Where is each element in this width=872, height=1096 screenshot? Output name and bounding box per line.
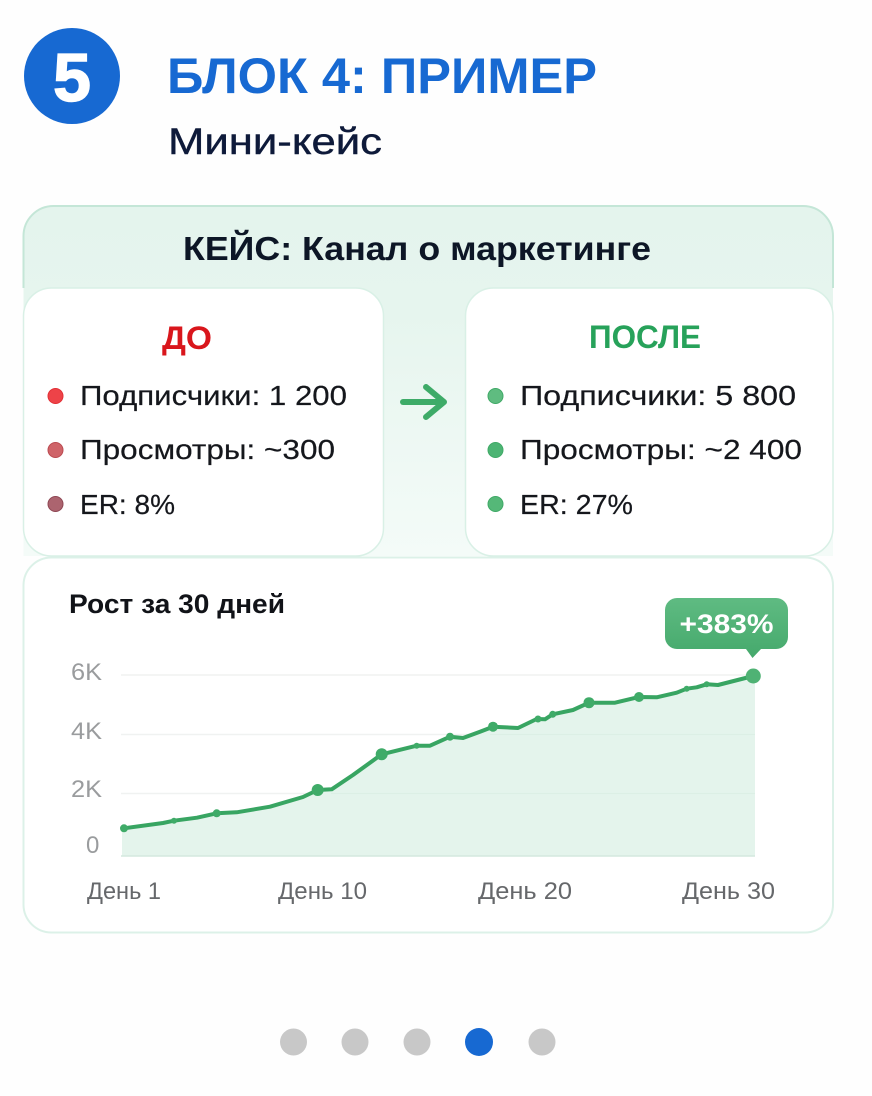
- case panel background: [24, 206, 833, 556]
- metric: views before: Просмотры: ~300: [80, 434, 335, 465]
- gridlines: [121, 675, 755, 794]
- icon: number badge: 5: [53, 40, 91, 116]
- x axis labels: День 20: [478, 878, 572, 905]
- gridlines over area: [331, 734, 755, 794]
- case panel border: [24, 206, 833, 288]
- chart card: [24, 558, 833, 932]
- chart title: Рост за 30 дней: [69, 589, 285, 619]
- data points: [120, 668, 761, 832]
- metric: subscribers before: Подписчики: 1 200: [80, 380, 347, 411]
- metric: ER after: ER: 27%: [520, 489, 633, 520]
- icon: number badge: [24, 28, 120, 124]
- before heading: ДО: [162, 320, 212, 356]
- after card: [466, 288, 833, 556]
- case heading: КЕЙС: Канал о маркетинге: [183, 229, 651, 267]
- arrow: [403, 387, 444, 417]
- x axis labels: День 1: [87, 878, 161, 905]
- growth line: [124, 676, 753, 828]
- pagination dots: [280, 1028, 556, 1056]
- x axis labels: [87, 878, 775, 905]
- y axis labels: 2K: [71, 776, 102, 803]
- baseline: [121, 855, 755, 857]
- x axis labels: День 10: [278, 878, 367, 905]
- metric: subscribers after: Подписчики: 5 800: [520, 380, 796, 411]
- title: БЛОК 4: ПРИМЕР: [167, 48, 597, 104]
- panel: case: [24, 206, 833, 556]
- y axis labels: 4K: [71, 718, 102, 745]
- before card: [24, 288, 384, 556]
- area fill: [122, 676, 755, 856]
- y axis labels: 0: [86, 832, 99, 859]
- x axis labels: День 30: [682, 878, 775, 905]
- metric: ER before: ER: 8%: [80, 489, 175, 520]
- panel: after: [466, 288, 833, 556]
- callout: growth percent: [665, 598, 788, 658]
- callout: growth percent: +383%: [680, 609, 774, 639]
- subtitle: Мини-кейс: [168, 121, 382, 162]
- metric: views after: Просмотры: ~2 400: [520, 434, 802, 465]
- panel: before: [24, 288, 384, 556]
- header: [24, 28, 597, 162]
- y axis labels: [71, 659, 102, 859]
- panel: growth chart: [24, 558, 833, 932]
- after heading: ПОСЛЕ: [589, 319, 701, 355]
- y axis labels: 6K: [71, 659, 102, 686]
